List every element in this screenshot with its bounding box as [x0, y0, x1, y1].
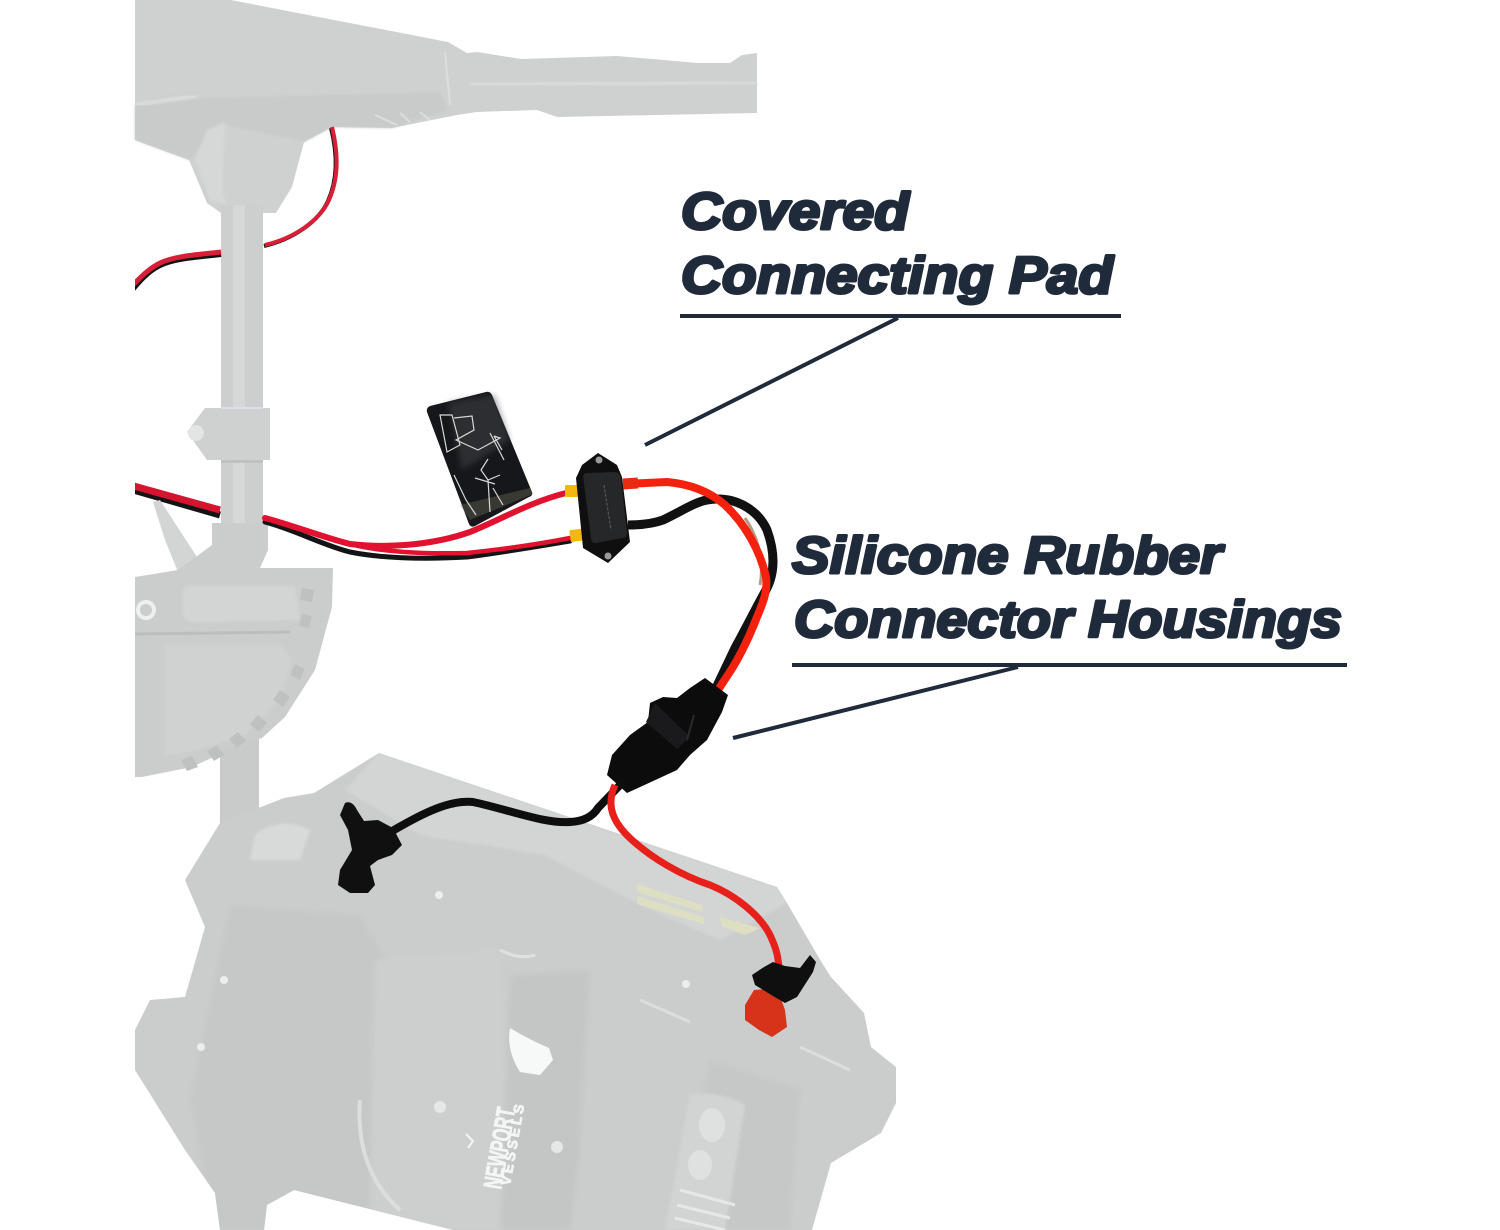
- silicone rubber connector housing: [607, 678, 728, 793]
- wire pair: left side to connecting pad: [130, 485, 220, 515]
- instruction tag: black card with white diagram: [427, 392, 533, 527]
- callout: covered connecting pad: [645, 183, 1121, 445]
- wire: from tiller handle to shaft: [130, 127, 337, 292]
- wire: red lead to positive terminal: [611, 785, 779, 968]
- battery logo: white emblem and brand: VESSELS: [497, 1103, 527, 1187]
- callout heading: silicone rubber connector housings: Silicone Rubber: [792, 527, 1225, 585]
- wire: red output from connecting pad to housing: [623, 482, 773, 690]
- callout heading: silicone rubber connector housings: Connector Housings: [794, 591, 1342, 649]
- motor shaft: faded lower section: [220, 735, 259, 835]
- wire: black lead to wing nut: [394, 783, 622, 830]
- connecting pad: covered with yellow terminals: [565, 453, 630, 563]
- callout heading: covered connecting pad: Covered: [681, 183, 910, 241]
- motor tiller handle: faded: [135, 0, 757, 213]
- battery control panel: faded detail: [665, 1094, 745, 1230]
- motor shaft: faded upper section: [221, 205, 263, 535]
- callout heading: covered connecting pad: Connecting Pad: [681, 247, 1114, 305]
- callout leader line: to connecting pad: [645, 316, 1121, 445]
- mount bracket: faded: [135, 500, 333, 777]
- wing nut: on positive terminal: [752, 955, 816, 1003]
- shaft clamp: faded: [187, 407, 270, 463]
- wire pair: crossing in front of shaft to connecting pad: [265, 493, 570, 558]
- battery logo: white emblem and brand: NEWPORT: [477, 1105, 521, 1191]
- callout: silicone rubber connector housings: [733, 527, 1347, 738]
- battery logo: white emblem and brand: [466, 1028, 553, 1191]
- battery box: faded: [135, 753, 896, 1230]
- battery label: yellow marks: [637, 884, 760, 935]
- positive terminal: red lug: [745, 988, 787, 1037]
- callout heading: silicone rubber connector housings: [792, 527, 1342, 649]
- callout leader line: to connector housing: [733, 665, 1347, 738]
- wing nut: black terminal: [338, 802, 402, 893]
- callout heading: covered connecting pad: [681, 183, 1114, 305]
